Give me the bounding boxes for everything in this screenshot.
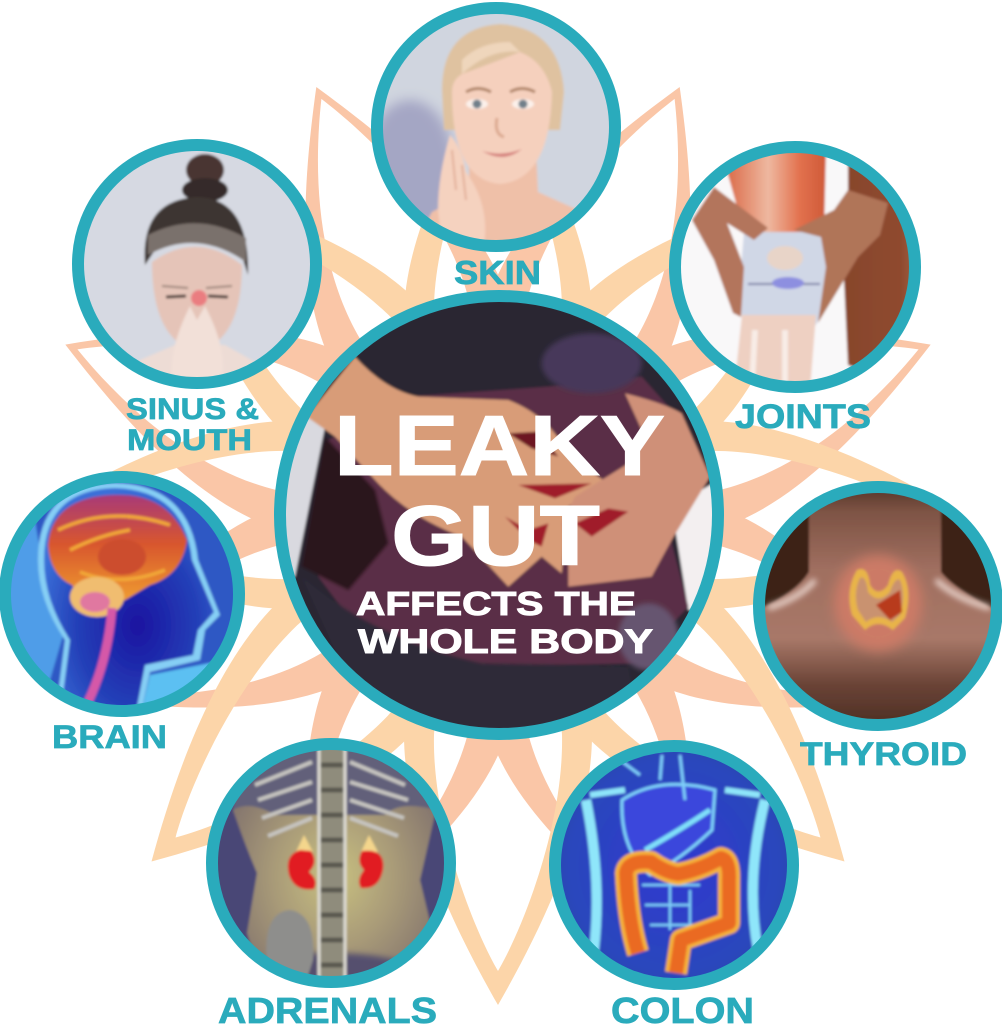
subtitle: affects the whole body: AFFECTS THE (356, 585, 636, 622)
panel: brain (0, 470, 246, 718)
label: sinus and mouth (126, 393, 259, 457)
ring: adrenals (212, 744, 450, 982)
label: sinus and mouth: SINUS & (126, 393, 259, 426)
photo: woman holding her nose (84, 151, 310, 377)
label: brain: BRAIN (52, 719, 167, 755)
label: sinus and mouth: MOUTH (127, 424, 252, 457)
panel: skin (365, 0, 622, 254)
title: leaky gut (334, 399, 665, 584)
title: leaky gut: LEAKY (334, 399, 665, 494)
ring: colon (555, 746, 793, 984)
ring: thyroid (759, 487, 997, 725)
photo: woman touching her face (383, 14, 609, 240)
label: thyroid: THYROID (800, 736, 967, 772)
panel: center leaky gut (275, 290, 725, 740)
label: joints: JOINTS (735, 398, 871, 436)
photo: glowing brain in head profile (11, 483, 233, 705)
ring: sinus (78, 145, 316, 383)
subtitle: affects the whole body: WHOLE BODY (358, 623, 653, 661)
panel: joints (668, 140, 925, 395)
photo: neck with highlighted thyroid (765, 493, 991, 719)
photo: hands on abdomen (286, 302, 712, 728)
ring: brain (5, 477, 239, 711)
label: skin: SKIN (454, 254, 541, 291)
ring: center (280, 296, 718, 734)
panel: sinus and mouth (72, 138, 322, 392)
title: leaky gut: GUT (391, 489, 600, 584)
photo: glowing colon in blue torso (561, 752, 787, 978)
panel: thyroid (752, 478, 1002, 736)
photo: hands holding a knee (681, 153, 909, 381)
panel: colon (548, 738, 800, 994)
photo: spine and kidneys with adrenal glands (218, 750, 444, 976)
panel: adrenals (205, 735, 457, 997)
subtitle: affects the whole body (356, 585, 653, 661)
ring: skin (377, 8, 615, 246)
ring: joints (675, 147, 915, 387)
